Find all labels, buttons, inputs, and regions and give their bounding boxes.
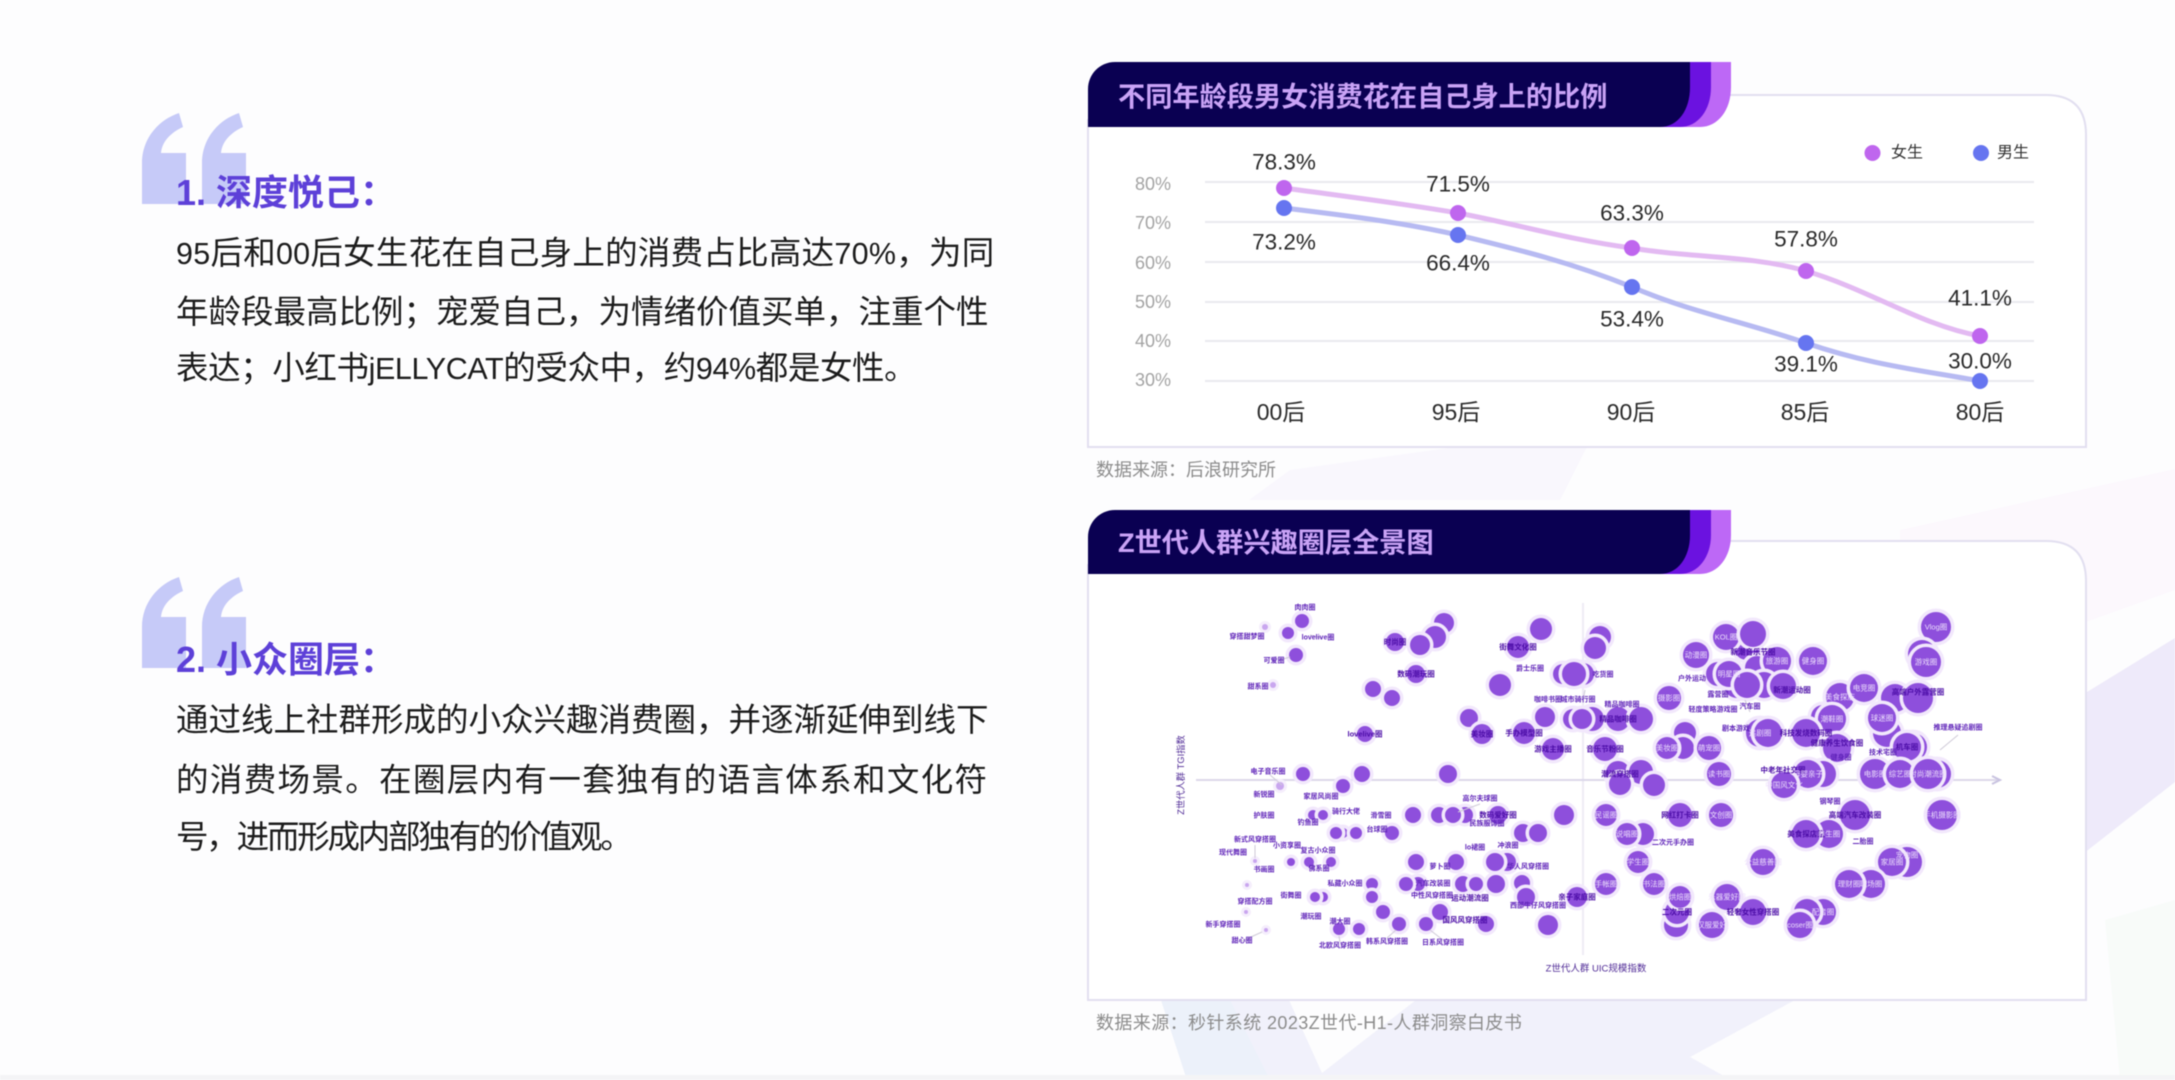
bubble chart: 亲子家庭圈 (1558, 892, 1596, 902)
body text: 95后和00后女生花在自己身上的消费占比高达70%，为同 (176, 235, 994, 271)
bubble chart: 钓鱼圈 (1298, 818, 1318, 826)
bubble chart: 理财圈 (1838, 878, 1860, 888)
bubble chart: 健身圈 (1830, 752, 1852, 762)
bubble chart: Vlog圈 (1925, 622, 1947, 632)
bubble chart: 剧本游戏 (1722, 724, 1750, 732)
bubble chart: 甜心圈 (1232, 936, 1252, 944)
bubble chart: 新锐圈 (1254, 790, 1274, 798)
bubble chart: 民谣圈 (1595, 810, 1617, 820)
heading: 2. 小众圈层： (176, 639, 396, 680)
bubble chart: 可爱圈 (1264, 656, 1284, 664)
bubble chart: 技术宅圈 (1869, 748, 1897, 756)
source note 1: 数据来源：后浪研究所 (1096, 460, 1276, 480)
bubble chart: 摄影圈 (1658, 692, 1680, 702)
bubble chart: 潮流穿搭圈 (1601, 768, 1639, 778)
bubble chart: 佛系圈 (1308, 864, 1330, 872)
bubble chart: lovelive圈 (1347, 730, 1383, 738)
bubble chart: 电竞圈 (1853, 682, 1875, 692)
bubble chart: 北欧风穿搭圈 (1319, 940, 1361, 950)
bubble chart: 养生圈 (1818, 828, 1840, 838)
heading: 1. 深度悦己： (176, 172, 396, 213)
line chart: 70% (1135, 213, 1171, 233)
bubble chart: 机车圈 (1896, 742, 1918, 752)
bubble chart: 国风风穿搭圈 (1442, 914, 1488, 924)
bubble chart: 精品咖啡圈 (1604, 700, 1640, 708)
bubble chart: Z世代人群 UIC规模指数 (1546, 962, 1647, 974)
bubble chart: 台球圈 (1366, 824, 1388, 834)
bubble chart: 汉服爱好 (1697, 920, 1727, 930)
bubble chart: 钢琴圈 (1820, 796, 1840, 806)
line chart: 95后 (1432, 399, 1480, 425)
body text: 号，进而形成内部独有的价值观。 (176, 819, 631, 855)
panel border (1086, 540, 2088, 1002)
bubble chart: 职场圈 (1860, 880, 1882, 888)
bubble chart: 追剧圈 (1749, 728, 1771, 738)
body text: 的消费场景。在圈层内有一套独有的语言体系和文化符 (176, 762, 988, 798)
bubble chart: 精品咖啡圈 (1599, 714, 1637, 724)
bubble chart: 西部牛仔风穿搭圈 (1510, 900, 1566, 910)
bubble chart: 手办模型圈 (1505, 728, 1543, 738)
body text: 通过线上社群形成的小众兴趣消费圈，并逐渐延伸到线下 (176, 702, 989, 738)
bubble chart: 游戏圈 (1915, 656, 1937, 666)
bubble chart: 汽车改装圈 (1416, 878, 1450, 888)
line chart: 39.1% (1774, 352, 1838, 376)
icon: quote mark (142, 112, 246, 204)
bubble chart: 游戏主播圈 (1534, 744, 1572, 754)
line chart: 41.1% (1948, 286, 2012, 310)
bubble chart: 中性风穿搭圈 (1411, 890, 1453, 900)
bubble chart: 宠物圈 (1896, 850, 1918, 860)
text block: 小众圈层 (142, 576, 989, 855)
bubble chart: 手帐圈 (1595, 878, 1617, 888)
bubble chart: 萝卜圈 (1430, 862, 1450, 870)
bubble chart: 配音圈 (1812, 906, 1834, 916)
panel: 兴趣圈层全景图 (1086, 509, 2088, 1002)
bubble chart: 时尚圈 (1384, 636, 1406, 646)
bubble chart: 电子音乐圈 (1250, 766, 1286, 776)
bubble chart: 数码爱好圈 (1479, 810, 1517, 820)
bubble chart: 书法圈 (1643, 878, 1665, 888)
bubble chart: 家居圈 (1881, 856, 1903, 866)
line chart: 80% (1135, 174, 1171, 194)
line chart: 85后 (1781, 399, 1829, 425)
bubble chart: 新式风穿搭圈 (1234, 834, 1276, 844)
bubble chart: 美食探店 (1825, 692, 1855, 702)
line chart: 女生 (1891, 142, 1923, 162)
text block: 深度悦己 (142, 112, 994, 386)
line chart: 57.8% (1774, 226, 1838, 252)
bubble chart: 街舞圈 (1280, 890, 1302, 900)
bubble chart: 穿搭甜梦圈 (1230, 632, 1264, 640)
line chart: 73.2% (1252, 230, 1316, 254)
line chart: 66.4% (1426, 250, 1490, 276)
bubble chart: Z世代人群 TGI指数 (1175, 735, 1186, 815)
icon: quote mark (142, 576, 246, 668)
bubble chart: 美妆圈 (1471, 728, 1493, 738)
line chart: 53.4% (1600, 306, 1664, 332)
bubble chart: 露营圈 (1708, 690, 1728, 698)
bubble chart: 复古小众圈 (1300, 846, 1336, 854)
bubble chart: lo裙圈 (1465, 842, 1485, 852)
bubble chart: 冲浪圈 (1498, 840, 1518, 850)
bubble chart: 护肤圈 (1254, 810, 1274, 820)
bubble chart: 咖啡书圈 (1534, 694, 1562, 704)
bubble chart: 母婴亲子 (1793, 768, 1823, 778)
bubble chart: 街舞文化圈 (1499, 642, 1537, 652)
line chart: 60% (1135, 253, 1171, 273)
bubble chart: 萌宠圈 (1698, 742, 1720, 752)
bubble chart: 潮鞋圈 (1821, 714, 1843, 724)
bubble chart: 甜系圈 (1248, 682, 1268, 690)
bubble chart: 滑雪圈 (1370, 810, 1392, 820)
bubble chart: 文创圈 (1710, 810, 1732, 820)
line chart: 30% (1135, 370, 1171, 390)
bubble chart: 民族服饰圈 (1470, 818, 1504, 828)
header bar (1087, 509, 1732, 575)
bubble chart: 汽车圈 (1740, 702, 1760, 710)
bubble chart: 潮玩圈 (1300, 912, 1322, 920)
bubble chart: 电影圈 (1864, 768, 1886, 778)
bubble chart: 新手穿搭圈 (1206, 920, 1240, 928)
bubble chart: coser圈 (1787, 920, 1813, 930)
line chart: 78.3% (1252, 150, 1316, 174)
bubble chart: 动漫圈 (1685, 650, 1707, 660)
bubble chart: 乐器爱好圈 (1708, 892, 1746, 902)
bubble chart: 综艺圈 (1889, 768, 1911, 778)
line chart: 男生 (1997, 144, 2029, 162)
line chart: 71.5% (1426, 172, 1490, 196)
line chart: 80后 (1956, 399, 2004, 425)
line chart: 00后 (1257, 399, 1305, 425)
bubble chart: 穿搭配方圈 (1238, 896, 1272, 906)
bubble chart: 华人风穿搭圈 (1507, 862, 1549, 870)
body text: 年龄段最高比例；宠爱自己，为情绪价值买单，注重个性 (176, 294, 989, 330)
bubble chart: 骑行大佬 (1332, 806, 1360, 816)
bubble chart: 韩系风穿搭圈 (1366, 936, 1408, 946)
bubble chart: 家居风尚圈 (1304, 792, 1338, 800)
bubble chart: 高端汽车改装圈 (1829, 810, 1881, 820)
bubble chart: 吃货圈 (1592, 670, 1614, 678)
body text (176, 702, 989, 855)
bubble chart: 私藏小众圈 (1328, 878, 1362, 888)
header bar (1087, 61, 1732, 128)
bubble chart: 中国风文化 (1765, 780, 1803, 790)
bubble chart: 推理悬疑追剧圈 (1934, 722, 1982, 732)
bubble chart: 说唱圈 (1616, 828, 1638, 838)
panel border (1086, 94, 2088, 448)
bubble chart: 数码潮玩圈 (1397, 668, 1435, 678)
bubble chart: 网红打卡圈 (1661, 810, 1699, 820)
bubble chart: 时尚潮流圈 (1909, 768, 1947, 778)
bubble chart: 高端户外露营圈 (1892, 686, 1944, 696)
line chart: 30.0% (1948, 348, 2012, 374)
header bar: Z世代人群兴趣圈层全景图 (1118, 527, 1434, 558)
bubble chart: 手机摄影圈 (1923, 810, 1961, 820)
bubble chart: 潮大圈 (1330, 916, 1350, 926)
bubble chart (1175, 602, 2002, 974)
bubble chart: 轻奢女性穿搭圈 (1727, 906, 1779, 916)
bubble chart: 二次元圈 (1662, 906, 1692, 916)
bubble chart: 书画圈 (1254, 864, 1274, 874)
bubble chart: 新潮音乐节圈 (1730, 646, 1776, 656)
bubble chart: KOL圈 (1715, 632, 1737, 642)
bubble chart: 日系风穿搭圈 (1422, 938, 1464, 946)
bubble chart: 健身圈 (1802, 656, 1824, 666)
bubble chart: 小资享圈 (1273, 840, 1301, 850)
bubble chart: 户外运动 (1678, 674, 1706, 682)
bubble chart: 二胎圈 (1852, 836, 1874, 846)
bubble chart: 二次元手办圈 (1652, 838, 1694, 846)
bubble chart: 旅游圈 (1766, 656, 1788, 666)
bubble chart: 球迷圈 (1871, 712, 1893, 722)
bubble chart: 高尔夫球圈 (1462, 794, 1498, 802)
line chart (1134, 142, 2034, 425)
bubble chart: 音乐节粉圈 (1586, 744, 1624, 754)
bubble chart: 轻度策略游戏圈 (1688, 704, 1738, 714)
body text: 表达；小红书jELLYCAT的受众中，约94%都是女性。 (176, 350, 916, 386)
bubble chart: 公益慈善圈 (1744, 856, 1782, 866)
bubble chart: 科技发烧数码圈 (1780, 728, 1832, 738)
bubble chart: 读书圈 (1708, 768, 1730, 778)
line chart: 50% (1135, 292, 1171, 312)
bubble chart: 新潮运动圈 (1773, 684, 1811, 694)
bubble chart: 运动潮流圈 (1451, 892, 1489, 902)
panel: 消费比例折线图 (1086, 61, 2088, 448)
line chart: 90后 (1607, 399, 1655, 425)
bubble chart: 爵士乐圈 (1516, 664, 1544, 672)
line chart: 63.3% (1600, 200, 1664, 226)
bubble chart: 健康养生饮食圈 (1811, 738, 1863, 748)
bubble chart: 学生圈 (1627, 856, 1649, 866)
bubble chart: 肉肉圈 (1294, 602, 1316, 612)
bubble chart: 现代舞圈 (1219, 848, 1247, 856)
body text (176, 235, 994, 386)
bubble chart: 美妆圈 (1656, 742, 1678, 752)
bubble chart: 城市骑行圈 (1560, 694, 1596, 704)
line chart: 40% (1135, 331, 1171, 351)
source note 2: 数据来源：秒针系统 2023Z世代-H1-人群洞察白皮书 (1096, 1013, 1522, 1033)
bubble chart: 烘焙圈 (1669, 892, 1691, 902)
bubble chart: 明星圈 (1718, 670, 1740, 678)
bubble chart: lovelive圈 (1302, 634, 1334, 642)
bubble chart: 美食探店圈 (1787, 828, 1825, 838)
header bar: 不同年龄段男女消费花在自己身上的比例 (1118, 81, 1607, 112)
bubble chart: 中老年社交圈 (1760, 764, 1806, 774)
